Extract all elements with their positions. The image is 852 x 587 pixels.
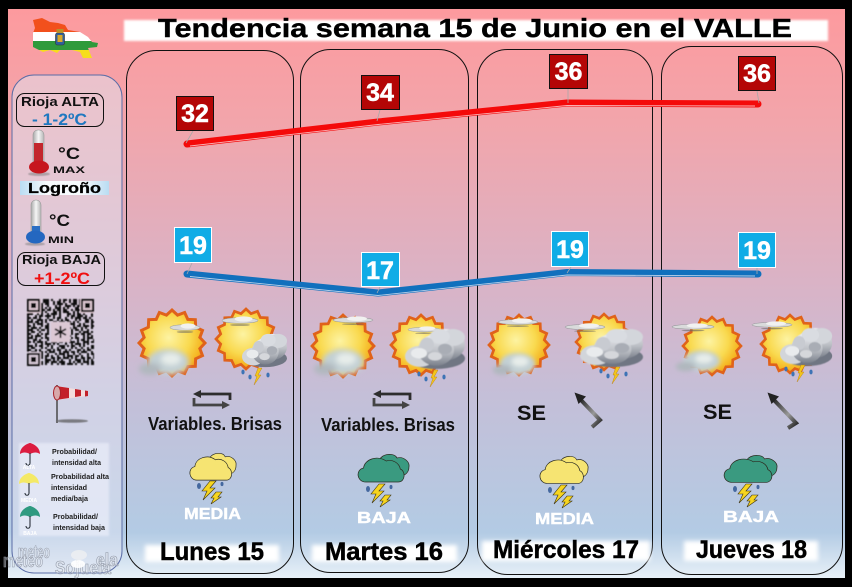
value: 34: 34 bbox=[366, 79, 394, 107]
panel: Jueves 18 bbox=[662, 46, 842, 574]
logo: meteo Sojuela: ela bbox=[96, 550, 119, 570]
label: °C MAX: MAX bbox=[53, 165, 86, 176]
label: Logroño bbox=[20, 180, 109, 197]
value: 36: 36 bbox=[555, 58, 582, 86]
day label: Miércoles 17: Miércoles 17 bbox=[493, 536, 639, 564]
value: 19: 19 bbox=[179, 232, 207, 260]
panel: rain probability legend bbox=[19, 443, 110, 537]
value: 19 bbox=[174, 228, 212, 262]
Rioja ALTA box: - 1-2ºC bbox=[32, 110, 87, 129]
icon: Miércoles morning sun bbox=[489, 315, 549, 375]
icon: Jueves afternoon storm bbox=[752, 315, 832, 382]
icon: storm probability Martes bbox=[358, 454, 409, 507]
legend text: media: intensidad bbox=[51, 483, 87, 492]
panel: Miércoles 17 bbox=[478, 50, 652, 574]
icon: storm probability Miércoles bbox=[540, 456, 588, 508]
wind label Miércoles: SE bbox=[517, 402, 546, 425]
label: °C MAX: °C bbox=[58, 144, 80, 163]
icon: QR code bbox=[27, 299, 94, 366]
label: BAJA: BAJA bbox=[723, 509, 780, 526]
logo: meteo Sojuela bbox=[3, 542, 119, 578]
icon: yellow umbrella: MEDIA bbox=[21, 498, 37, 504]
day label: Jueves 18: Jueves 18 bbox=[696, 536, 807, 564]
value: 19 bbox=[738, 232, 776, 268]
wind label Martes: Variables. Brisas bbox=[321, 415, 455, 435]
panel: Lunes 15 bbox=[126, 50, 294, 574]
icon: variable wind arrows Martes bbox=[373, 390, 410, 409]
line chart: max temperature bbox=[176, 54, 776, 146]
icon: variable wind arrows Lunes bbox=[193, 390, 230, 409]
icon: Lunes afternoon storm bbox=[216, 309, 287, 385]
icon: green umbrella: BAJA bbox=[23, 531, 37, 537]
Rioja ALTA box bbox=[16, 94, 104, 129]
logo: meteo Sojuela: meteo bbox=[3, 551, 43, 571]
legend text: alta bbox=[52, 447, 102, 467]
Rioja BAJA box: +1-2ºC bbox=[34, 269, 90, 288]
value: 36: 36 bbox=[743, 60, 771, 88]
legend text: alta: Probabilidad/ bbox=[52, 447, 98, 456]
logo: meteo Sojuela: Sojuela bbox=[55, 558, 112, 578]
icon: wind arrow Jueves bbox=[768, 392, 796, 428]
day label: Martes 16: Martes 16 bbox=[325, 538, 443, 566]
value: 32: 32 bbox=[181, 100, 209, 128]
icon: max thermometer bbox=[28, 130, 50, 176]
value: 36 bbox=[738, 56, 776, 90]
label: BAJA: BAJA bbox=[357, 510, 412, 527]
value: 19 bbox=[552, 232, 588, 266]
icon: min thermometer bbox=[25, 200, 45, 246]
legend text: media bbox=[51, 472, 110, 503]
label: °C MIN: °C bbox=[49, 211, 70, 230]
icon: wind arrow Miércoles bbox=[574, 392, 600, 427]
icon: Lunes morning sun bbox=[139, 310, 205, 376]
icon: storm probability Lunes bbox=[190, 453, 236, 504]
panel: Martes 16 bbox=[300, 50, 468, 572]
legend text: alta: intensidad alta bbox=[52, 458, 102, 467]
line chart: min temperature bbox=[174, 228, 776, 296]
value: 32 bbox=[176, 96, 214, 130]
label: °C MIN bbox=[48, 211, 74, 246]
wind label Jueves: SE bbox=[703, 401, 732, 424]
label: MEDIA: MEDIA bbox=[535, 511, 595, 528]
icon: windsock bbox=[54, 385, 88, 423]
icon: La Rioja flag map bbox=[33, 18, 98, 58]
value: 19: 19 bbox=[743, 237, 771, 265]
Rioja BAJA box: Rioja BAJA bbox=[22, 252, 102, 267]
label: °C MAX bbox=[53, 144, 86, 176]
value: 17 bbox=[362, 252, 400, 286]
value: 34 bbox=[362, 76, 400, 110]
value: 36 bbox=[550, 54, 588, 88]
value: 17: 17 bbox=[366, 257, 394, 285]
panel: legend sidebar bbox=[3, 75, 122, 578]
logo: meteo Sojuela: meteo bbox=[18, 542, 50, 562]
value: 19: 19 bbox=[556, 236, 584, 264]
label: °C MIN: MIN bbox=[48, 235, 74, 246]
icon: red umbrella: ALTA bbox=[23, 465, 36, 471]
legend text: media: media/baja bbox=[51, 494, 89, 503]
label: Logroño: Logroño bbox=[28, 180, 101, 197]
legend text: baja: intensidad baja bbox=[53, 523, 106, 532]
legend text: baja bbox=[53, 512, 106, 532]
legend text: media: Probabilidad alta bbox=[51, 472, 110, 481]
Rioja ALTA box: Rioja ALTA bbox=[21, 94, 100, 109]
icon: storm probability Jueves bbox=[724, 455, 777, 507]
title: Tendencia semana 15 de Junio en el VALLE bbox=[158, 13, 792, 43]
icon: Miércoles afternoon storm bbox=[565, 314, 643, 384]
icon: Jueves morning sun bbox=[672, 317, 741, 375]
icon: Martes morning sun bbox=[312, 315, 374, 377]
Rioja BAJA box bbox=[18, 252, 104, 288]
icon: Martes afternoon storm bbox=[391, 315, 465, 387]
legend text: baja: Probabilidad/ bbox=[53, 512, 99, 521]
wind label Lunes: Variables. Brisas bbox=[148, 414, 282, 434]
day label: Lunes 15: Lunes 15 bbox=[160, 538, 264, 566]
label: MEDIA: MEDIA bbox=[184, 506, 241, 523]
